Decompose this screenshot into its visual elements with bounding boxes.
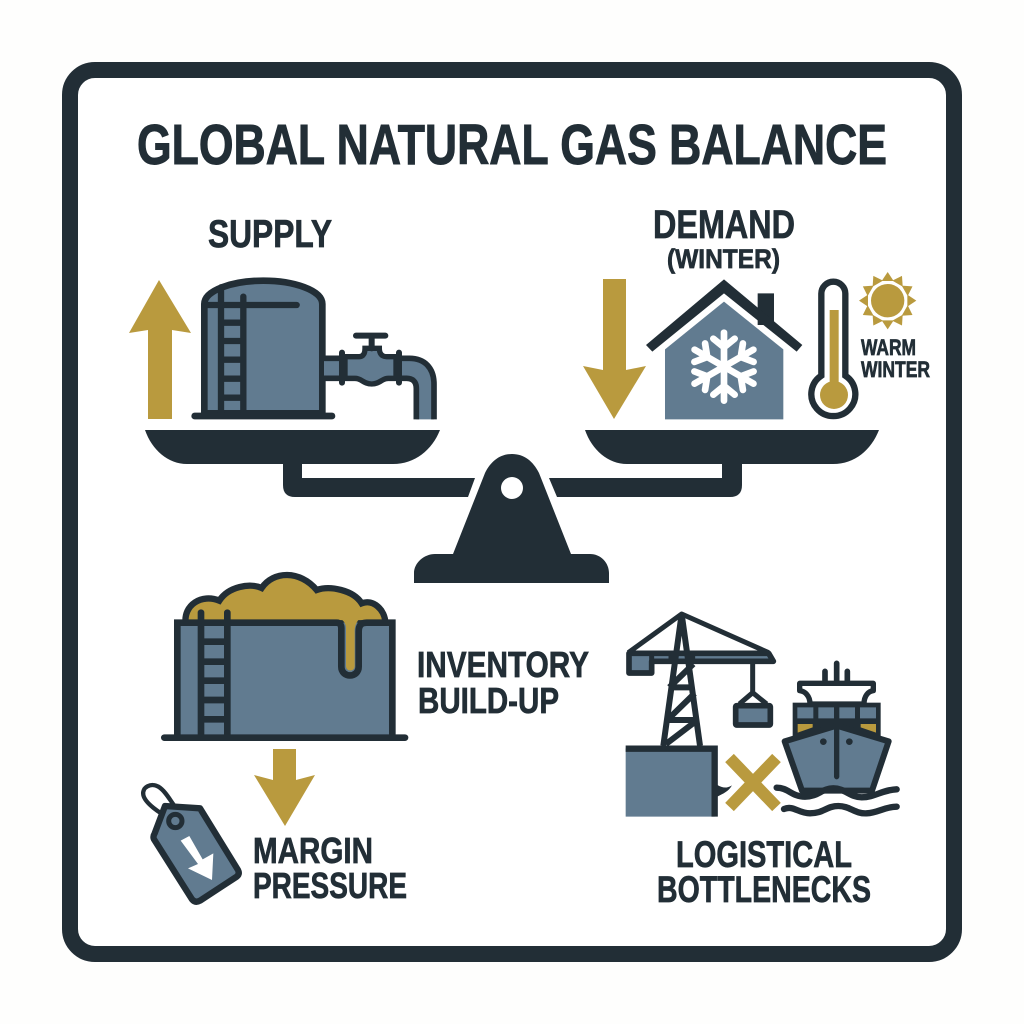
icon: inventory down arrow	[254, 749, 315, 826]
icon: supply tank with pipe	[195, 281, 434, 419]
icon: demand down arrow	[583, 279, 646, 419]
icon: price tag	[143, 785, 239, 902]
icon: cargo ship	[777, 663, 897, 813]
heading: supply: SUPPLY	[208, 213, 332, 256]
icon: overflowing inventory tank	[164, 575, 405, 738]
label: margin pressure	[253, 830, 407, 906]
label: margin pressure: PRESSURE	[253, 865, 407, 906]
heading: demand: DEMAND	[653, 203, 795, 247]
label: warm winter: WINTER	[861, 357, 930, 382]
balance scale	[145, 430, 879, 583]
icon: port crane and dock	[626, 614, 773, 817]
icon: thermometer	[811, 282, 855, 416]
icon: sun	[859, 272, 916, 329]
label: warm winter	[861, 335, 930, 382]
label: logistical bottlenecks: BOTTLENECKS	[657, 869, 871, 910]
icon: supply up arrow	[129, 280, 191, 419]
label: inventory build-up: INVENTORY	[417, 644, 589, 685]
label: logistical bottlenecks	[657, 834, 871, 910]
label: inventory build-up	[417, 644, 589, 721]
label: warm winter: WARM	[861, 335, 916, 360]
outer frame	[70, 70, 954, 954]
icon: blocked x mark	[730, 758, 776, 807]
label: logistical bottlenecks: LOGISTICAL	[676, 834, 852, 875]
label: inventory build-up: BUILD-UP	[418, 680, 559, 721]
subheading: winter: (WINTER)	[667, 244, 780, 274]
label: margin pressure: MARGIN	[253, 830, 373, 871]
icon: house with snowflake	[646, 279, 802, 419]
